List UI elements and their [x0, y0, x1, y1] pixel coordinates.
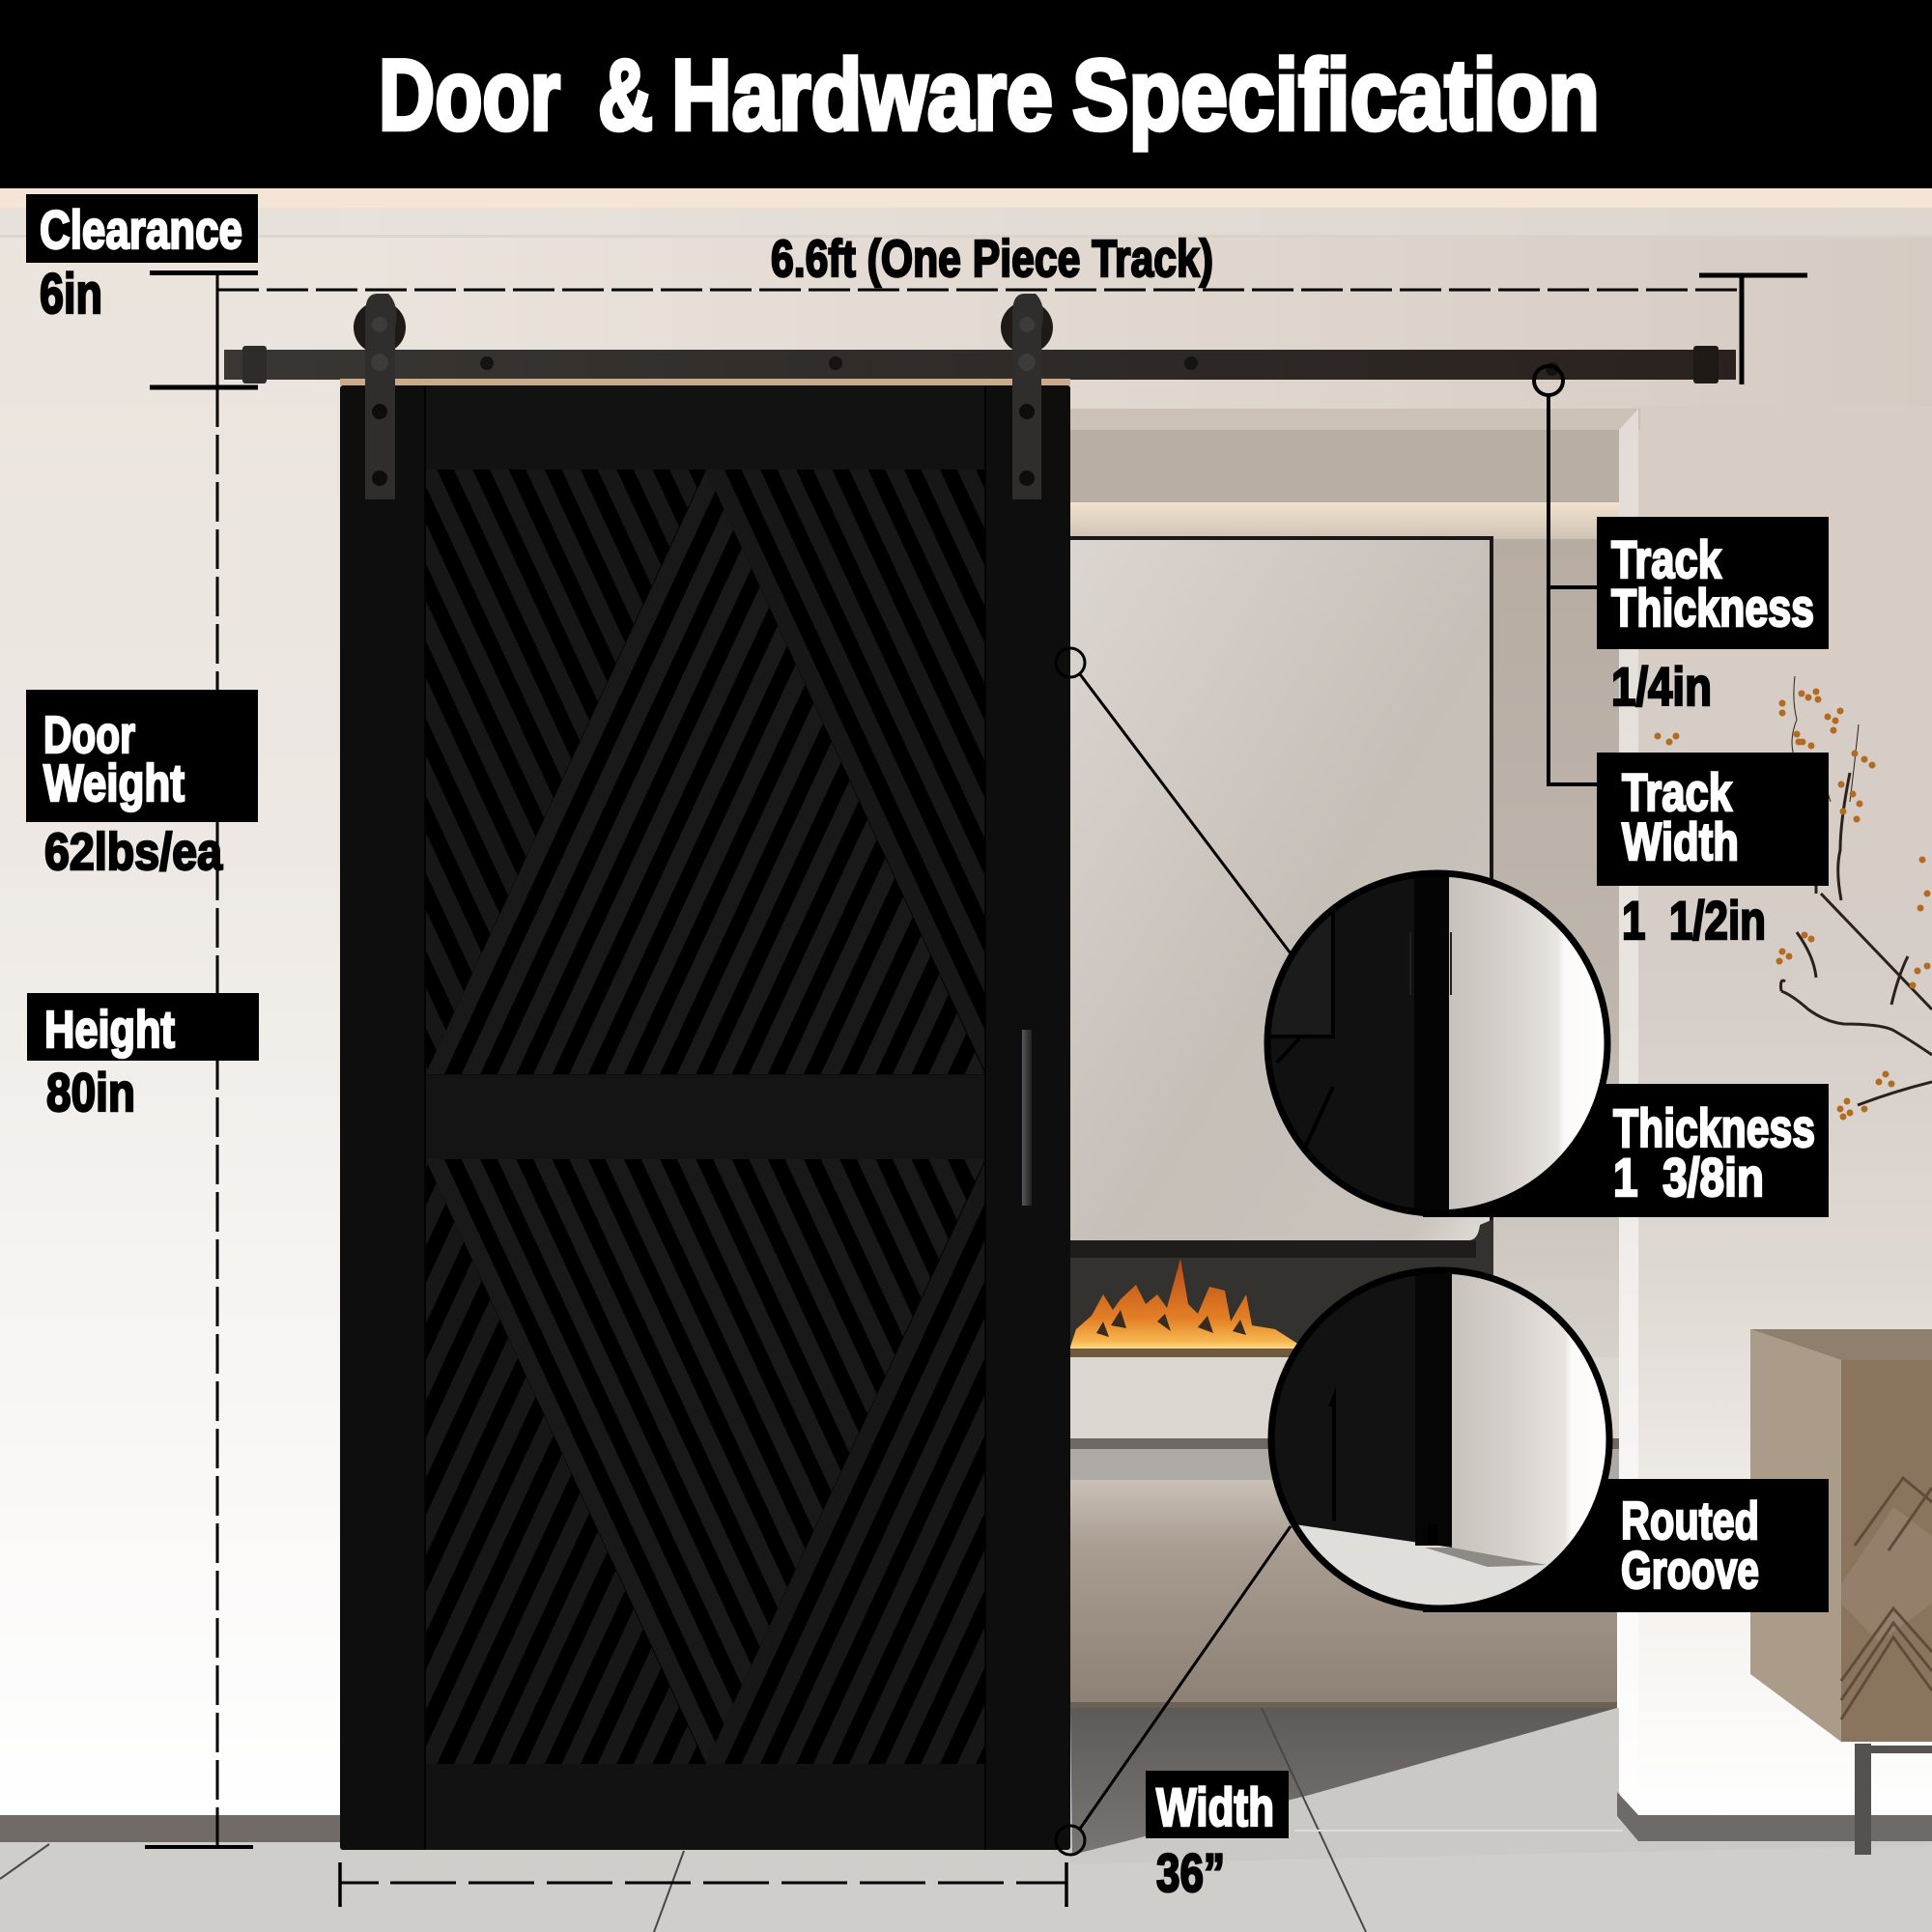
door thickness leader — [1056, 648, 1291, 953]
cabinet — [1750, 1329, 1932, 1855]
label: door weight: Door — [43, 706, 135, 764]
right roller hanger — [1001, 294, 1053, 499]
title: Specification — [1072, 40, 1600, 152]
title: Hardware — [671, 40, 1053, 152]
fire flames — [1070, 1259, 1299, 1350]
tile joints — [0, 1708, 1366, 1932]
label: width: Width — [1156, 1776, 1274, 1837]
fire bar — [1070, 1349, 1302, 1357]
callout circle: door thickness — [1265, 869, 1613, 1217]
door handle — [1022, 1030, 1032, 1206]
label: routed groove: Routed — [1621, 1491, 1759, 1550]
barn door — [50, 276, 1373, 1932]
middle rail — [426, 1075, 984, 1159]
bottom rail — [426, 1764, 984, 1850]
cabinet side — [1750, 1329, 1841, 1742]
title — [379, 40, 1600, 152]
cabinet relief stones — [1841, 1507, 1932, 1642]
door jamb — [1619, 409, 1638, 1841]
label: track thickness: Track — [1611, 529, 1721, 589]
label: door thickness: Thickness — [1613, 1097, 1815, 1158]
track end stop right — [1693, 346, 1719, 384]
thin twigs — [1792, 676, 1859, 802]
slat panel upper — [50, 276, 1373, 1267]
label: track width: Width — [1622, 811, 1739, 871]
groove leader — [1056, 1526, 1291, 1855]
soffit — [1070, 409, 1640, 430]
label: door thickness — [1613, 1097, 1815, 1208]
label: track thickness: Thickness — [1611, 578, 1814, 638]
side wall — [1492, 539, 1619, 1439]
label: door weight: Weight — [43, 754, 185, 812]
cabinet chevrons — [1841, 1478, 1932, 1719]
stile seams — [425, 385, 985, 1850]
callout circle: routed groove — [1265, 1256, 1623, 1613]
sliding track — [224, 346, 1736, 384]
track bolts — [480, 356, 1559, 376]
fireplace top shade — [1070, 1240, 1476, 1258]
dimension: track length label: 6.6ft (One Piece Track) — [771, 230, 1213, 288]
value: door weight: 62lbs/ea — [44, 823, 223, 881]
label: routed groove — [1621, 1491, 1759, 1600]
branch decoration — [1654, 676, 1932, 1121]
cabinet leg — [1855, 1744, 1932, 1855]
right wall base — [1617, 1792, 1932, 1841]
cabinet front — [1841, 1360, 1932, 1742]
left wall — [0, 188, 348, 1821]
label: track width — [1597, 753, 1829, 886]
dimension: track length line — [217, 275, 1807, 384]
left skirting — [0, 1815, 340, 1842]
value: height: 80in — [46, 1062, 135, 1122]
door slab — [340, 385, 1070, 1850]
label: routed groove: Groove — [1621, 1540, 1759, 1600]
value: track width: 1 1/2in — [1622, 890, 1766, 951]
floor shadow — [1070, 1708, 1617, 1855]
label: thickness background — [1423, 1084, 1829, 1217]
top rail — [425, 385, 985, 469]
light tile joint — [1294, 1830, 1623, 1832]
label: door weight — [26, 690, 258, 822]
dimension: door width line — [340, 1862, 1066, 1907]
right wall — [1633, 406, 1932, 1818]
label: height: Height — [44, 1001, 175, 1059]
label: groove background — [1423, 1479, 1829, 1612]
skirting — [1070, 1438, 1619, 1449]
branches — [1781, 773, 1932, 1105]
track callout leader — [1534, 366, 1597, 784]
value: track thickness: 1/4in — [1611, 656, 1712, 717]
value: width: 36” — [1156, 1842, 1225, 1903]
light strip above door — [340, 379, 1070, 385]
label: door thickness: 1 3/8in — [1613, 1147, 1764, 1208]
title: & — [598, 40, 653, 152]
cabinet top face — [1750, 1329, 1932, 1360]
room seen through the opening — [1070, 409, 1640, 1708]
berries — [1654, 688, 1930, 1121]
label: height — [27, 993, 259, 1061]
room ceiling — [1070, 430, 1619, 503]
value: clearance: 6in — [40, 263, 102, 326]
rug — [1070, 1480, 1617, 1704]
rug fringe — [1070, 1702, 1617, 1708]
slat panel lower — [50, 966, 1373, 1932]
marble base — [1070, 1357, 1619, 1438]
track end stop left — [242, 346, 267, 384]
back wall panel — [1070, 539, 1492, 1240]
dimension: clearance and height lines — [145, 272, 258, 1847]
title: Door — [379, 40, 560, 152]
door frame lines — [1070, 538, 1492, 1355]
label: track width: Track — [1622, 762, 1732, 822]
floor — [0, 1708, 1932, 1932]
floor strip — [1070, 1449, 1619, 1482]
ceiling light glow — [1070, 502, 1619, 539]
label: track thickness — [1597, 517, 1829, 649]
fireplace surround — [1070, 1219, 1493, 1355]
header band — [0, 0, 1932, 188]
ceiling cove and moulding — [0, 188, 1932, 238]
label: clearance: Clearance — [40, 199, 242, 260]
top wall above the opening — [340, 188, 1932, 420]
left roller hanger — [354, 294, 406, 499]
